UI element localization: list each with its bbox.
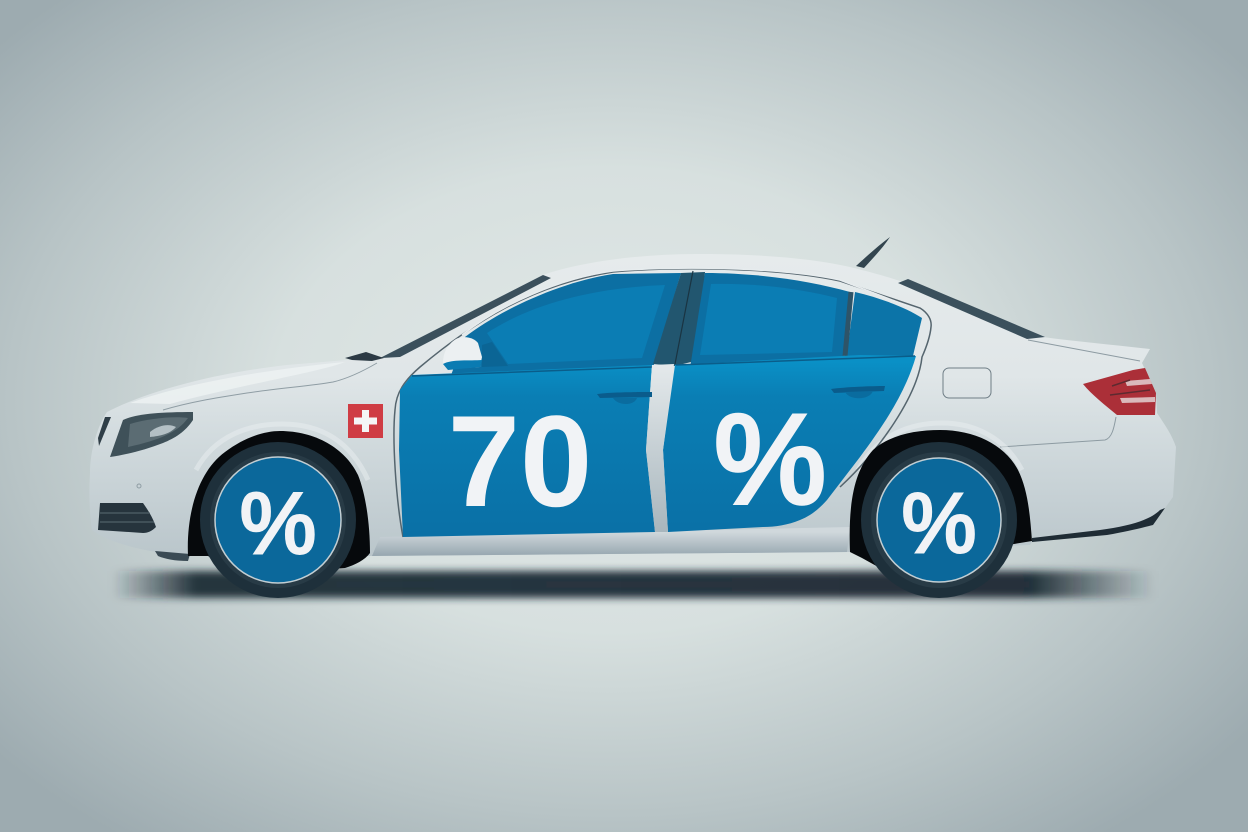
headlight bbox=[110, 412, 193, 457]
front wheel arch bbox=[188, 431, 370, 575]
front door handle bbox=[597, 392, 652, 404]
70 label: 70 bbox=[448, 388, 592, 534]
deck lid line bbox=[1028, 340, 1140, 361]
chrome strip bbox=[462, 268, 918, 335]
belt line bbox=[412, 356, 915, 376]
hood crease bbox=[163, 363, 377, 410]
windscreen strip bbox=[380, 275, 551, 358]
front grille slit bbox=[98, 417, 111, 446]
door percent label: % bbox=[714, 389, 826, 530]
door gap strip bbox=[646, 364, 674, 532]
parking sensor bbox=[137, 484, 141, 488]
door seam and window frame outline bbox=[394, 269, 931, 537]
B pillar bbox=[653, 272, 705, 366]
car body bbox=[89, 254, 1176, 556]
rear window inner glass bbox=[700, 284, 837, 355]
rear quarter window bbox=[846, 292, 922, 360]
tail light bbox=[1083, 368, 1156, 415]
rear wheel arch bbox=[850, 430, 1032, 568]
front fog vent bbox=[98, 503, 156, 533]
rear wheel bbox=[861, 442, 1017, 598]
rear window bbox=[690, 273, 850, 368]
hood highlight bbox=[130, 362, 345, 404]
front wheel bbox=[200, 442, 356, 598]
wiper bbox=[345, 352, 384, 361]
blue rear door panel bbox=[663, 355, 916, 532]
rear wheel percent: % bbox=[902, 476, 976, 570]
blue front door panel bbox=[399, 365, 655, 537]
rear skirt bbox=[1032, 508, 1165, 542]
window divider bbox=[845, 292, 851, 356]
rear bumper seam bbox=[1000, 417, 1116, 447]
sill bbox=[372, 527, 850, 556]
ground shadow bbox=[112, 571, 1155, 598]
car bbox=[89, 237, 1176, 598]
fuel cap bbox=[943, 368, 991, 398]
fender highlight rear bbox=[858, 423, 1022, 470]
front window inner glass bbox=[487, 285, 665, 364]
under lip bbox=[155, 551, 190, 561]
front wheel percent: % bbox=[240, 476, 316, 572]
antenna bbox=[856, 237, 890, 268]
rear door handle bbox=[831, 386, 885, 398]
front window bbox=[450, 273, 681, 378]
fender highlight front bbox=[196, 424, 368, 480]
pillar seam bbox=[675, 271, 693, 364]
side mirror bbox=[443, 337, 508, 370]
rear screen strip bbox=[898, 279, 1045, 339]
Swiss flag badge bbox=[348, 404, 383, 438]
